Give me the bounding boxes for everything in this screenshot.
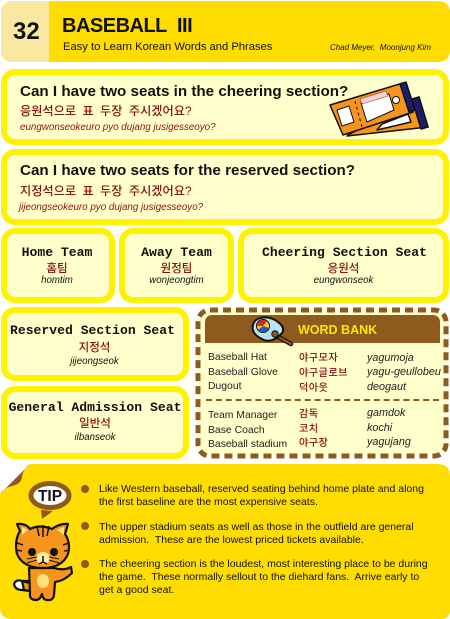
korean column (299, 408, 328, 449)
icon: fan (252, 316, 294, 346)
word list: group one (208, 352, 441, 394)
dashed divider (206, 399, 439, 401)
question: Can I have two seats in the cheering section? (20, 83, 348, 100)
lesson number (1, 1, 49, 62)
korean column: 야구장 (299, 438, 328, 449)
romanization column (366, 407, 411, 448)
korean: 홈팀 (46, 263, 68, 275)
english: General Admission Seat (9, 400, 181, 415)
korean: 지정석 (79, 342, 110, 354)
bullet (81, 522, 89, 530)
question: Can I have two seats for the reserved section? (20, 162, 355, 179)
romanization: jijeongseok (70, 356, 119, 367)
tip text: Like Western baseball, reserved seating behind home plate and along (99, 483, 424, 495)
tip bullet one (81, 483, 424, 508)
authors: Chad Meyer, Moonjung Kim (330, 43, 431, 52)
word bank background (196, 308, 448, 458)
tip text: The upper stadium seats as well as those in the outfield are general (99, 521, 414, 533)
english column: Team Manager (208, 410, 277, 421)
romanization column (366, 352, 441, 393)
panel: cheering section question (1, 69, 449, 145)
english column (208, 352, 278, 392)
english column: Baseball stadium (208, 439, 287, 450)
tip bullet three (81, 558, 428, 596)
romanization: wonjeongtim (149, 275, 204, 286)
english column: Baseball Hat (208, 352, 267, 363)
romanization: homtim (41, 275, 73, 286)
korean column: 야구모자 (299, 353, 338, 364)
korean column: 덕아웃 (299, 383, 328, 394)
korean: 응원석 (328, 263, 359, 275)
romanization column: yagujang (367, 436, 411, 448)
panel: home team (1, 228, 115, 303)
english column: Dugout (208, 381, 242, 392)
korean: 응원석으로 표 두장 주시겠어요? (20, 104, 192, 118)
word list: group two (208, 407, 411, 450)
panel: reserved section seat (1, 307, 189, 381)
tip bullet two (81, 521, 414, 546)
tip text (99, 483, 424, 508)
english: Cheering Section Seat (262, 245, 427, 260)
title: BASEBALL III (62, 15, 192, 37)
icon: tiger cat (12, 522, 74, 602)
romanization column: yagu-geullobeu (367, 366, 441, 378)
tip text: the first baseline are the most expensive seats. (99, 496, 318, 508)
word bank header (205, 315, 440, 343)
romanization: jijeongseokeuro pyo dujang jusigesseoyo? (19, 202, 203, 213)
english: Home Team (22, 245, 92, 260)
english column: Base Coach (208, 424, 265, 436)
romanization: eungwonseokeuro pyo dujang jusigesseoyo? (20, 122, 216, 133)
english: Reserved Section Seat (10, 323, 175, 338)
korean column (299, 352, 348, 394)
korean: 지정석으로 표 두장 주시겠어요? (20, 184, 192, 198)
panel: word bank (196, 308, 448, 458)
romanization: ilbanseok (75, 432, 115, 443)
english column: Baseball Glove (208, 366, 278, 378)
bullet (81, 485, 89, 493)
korean: 일반석 (79, 418, 111, 430)
header banner (1, 1, 450, 62)
tip text: get a good seat. (99, 584, 174, 596)
speech bubble: TIP (28, 481, 72, 519)
romanization column: kochi (367, 422, 392, 434)
panel: tip (0, 464, 450, 619)
panel: away team (119, 228, 234, 303)
korean column: 코치 (299, 424, 319, 434)
panel: cheering section seat (238, 228, 449, 303)
romanization: eungwonseok (314, 275, 373, 286)
tip text (99, 521, 414, 546)
subtitle: Easy to Learn Korean Words and Phrases (63, 41, 272, 53)
speech bubble: TIP: TIP (38, 488, 62, 505)
english: Away Team (141, 245, 212, 260)
tip text: The cheering section is the loudest, most interesting place to be during (99, 558, 428, 570)
english column (208, 410, 287, 450)
lesson number: 32 (13, 18, 40, 45)
romanization column: yagumoja (367, 352, 414, 364)
korean: 원정팀 (161, 263, 192, 275)
tip text: the game. These normally sellout to the diehard fans. Arrive early to (99, 571, 419, 583)
korean column: 야구글로브 (299, 368, 348, 379)
panel: reserved section question (1, 149, 449, 225)
romanization column: gamdok (367, 407, 405, 419)
korean column: 감독 (299, 409, 319, 420)
tip text (99, 558, 428, 596)
panel: general admission seat (1, 386, 189, 459)
bullet (81, 560, 89, 568)
romanization column: deogaut (367, 381, 406, 393)
word bank heading: WORD BANK (298, 323, 377, 337)
tip text: admission. These are the lowest priced tickets available. (99, 534, 364, 546)
tip background (0, 464, 450, 619)
icon: baseball tickets (329, 81, 429, 137)
